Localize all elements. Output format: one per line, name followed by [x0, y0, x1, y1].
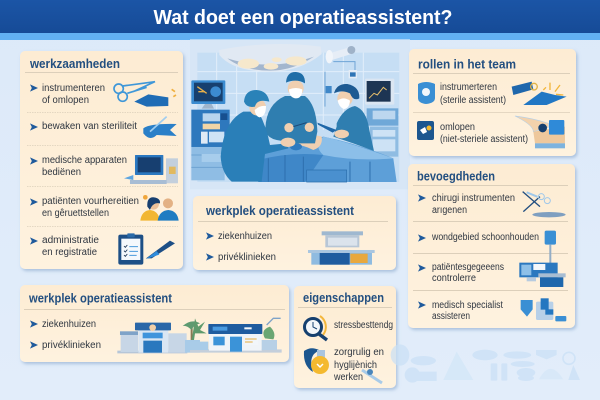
heading: rollen in het team: rollen in het team [418, 56, 516, 72]
icon: hospital and clinic [117, 321, 200, 353]
item: administratie en registratie: administratie [42, 235, 99, 246]
icon: infusion stand [545, 231, 556, 264]
icon: medical instruments [521, 298, 566, 321]
left machine [191, 110, 230, 180]
item: zorgvuldig en hygienisch werken: werken [333, 372, 363, 383]
item: privéklinieken: privéklinieken [218, 252, 276, 263]
icon: sterile cloth [143, 117, 177, 138]
item: wondgebied schoonhouden: wondgebied schoonhouden [431, 232, 539, 243]
item: patientengegevens controleren: patiëntesgegeeens [432, 262, 504, 273]
item: medische apparaten bedienen: medische apparaten [42, 155, 127, 166]
illustration: operating room [190, 39, 410, 189]
item: patientengegevens controleren [418, 262, 504, 284]
item: medisch specialist assisteren: assisteren [432, 311, 470, 322]
item: bewaken van steriliteit: bewaken van steriliteit [42, 121, 137, 132]
item: chirurgische instrumenten aangeven [418, 193, 515, 216]
item: administratie en registratie: en registratie [42, 247, 97, 258]
item: omlopen (niet-steriele assistent): omlopen [440, 122, 475, 133]
icon: monitor station [519, 263, 566, 287]
panel: werkplek operatieassistent (large) [20, 285, 289, 362]
item: patientengegevens controleren: controlerre [432, 273, 476, 284]
icon: two patients [140, 195, 179, 221]
iv bag [325, 62, 357, 107]
heading: eigenschappen: eigenschappen [303, 290, 384, 305]
item: omlopen (niet-steriele assistent): (niet-steriele assistent) [440, 134, 528, 145]
item: medische apparaten bedienen [30, 155, 127, 178]
heading: werkplek: werkplek operatieassistent [205, 203, 355, 218]
item: patienten voorbereiden: en gêruettstellen [42, 208, 109, 219]
surgeon centre [265, 72, 317, 143]
icon: shield [418, 82, 435, 104]
heading: werkzaamheden: werkzaamheden [29, 56, 120, 71]
item: instrumenteren: instrumenteren [42, 83, 105, 94]
assistant right [317, 84, 374, 151]
item: medisch specialist assisteren: medisch specialist [432, 300, 503, 311]
decorative faded medical icons [391, 344, 580, 383]
item: instrumenteren (sterile assistent): instrumerteren [440, 82, 497, 93]
item: instrumenteren [30, 83, 105, 106]
item: administratie en registratie [30, 235, 99, 258]
icon: reception desk [308, 231, 375, 265]
icon: blue square [417, 121, 434, 140]
icon: clipboard and pen [118, 233, 175, 265]
item: patienten voorbereiden [30, 196, 139, 219]
item: instrumenteren (sterile assistent): (sterile assistent) [440, 95, 506, 106]
panel: werkzaamheden [20, 51, 183, 269]
item: ziekenhuizen: ziekenhuizen [218, 231, 272, 242]
item: omlopen (niet-steriele assistent) [417, 121, 528, 145]
icon: hand with devices [515, 116, 565, 148]
right monitor [365, 79, 394, 105]
icon: surgical scissors [523, 192, 566, 217]
heading: bevoegdheden: bevoegdheden [417, 168, 495, 184]
item: ziekenhuizen: ziekenhuizen [42, 319, 96, 330]
panel: eigenschappen [294, 286, 396, 388]
right machine [367, 108, 398, 157]
item: stressbestendig: stressbesttendg [334, 320, 393, 331]
item: zorgvuldig en hygienisch werken: zorgrulig en [334, 347, 384, 358]
left monitor [191, 80, 225, 109]
item: medisch specialist assisteren [418, 300, 503, 322]
icon: medical device computer [124, 155, 178, 184]
patient [290, 134, 322, 150]
panel: bevoegdheden [408, 164, 575, 328]
title banner [0, 0, 600, 40]
icon: hygiene shield [304, 348, 382, 383]
icon: clock magnifier [304, 316, 327, 340]
icon: scissors and drape [114, 82, 176, 107]
panel: werkplek operatieassistent (small) [193, 196, 396, 270]
item: privéklinieken: privéklinieken [42, 340, 101, 351]
icon: instrument and light [512, 82, 567, 105]
item: chirurgische instrumenten aangeven: chirugi instrumenten [432, 193, 515, 204]
title banner: Wat doet een operatieassistent? [154, 6, 452, 29]
item: medische apparaten bedienen: bediënen [42, 167, 81, 178]
item: instrumenteren: of omlopen [42, 95, 89, 106]
item: chirurgische instrumenten aangeven: arıgenen [432, 205, 467, 216]
icon: clinic building [190, 318, 282, 353]
item: zorgvuldig en hygienisch werken: hyglijènich [334, 360, 377, 371]
assistant left [221, 90, 295, 182]
item: zorgvuldig en hygienisch werken [304, 347, 384, 383]
item: instrumenteren (sterile assistent) [418, 82, 506, 106]
item: patienten voorbereiden: patiënten vourhereitien [42, 196, 139, 207]
panel: rollen in het team [409, 49, 576, 156]
surgical lamp [219, 44, 355, 72]
heading: werkplek: werkplek operatieassistent [28, 290, 173, 306]
operating table with drape [258, 137, 397, 182]
